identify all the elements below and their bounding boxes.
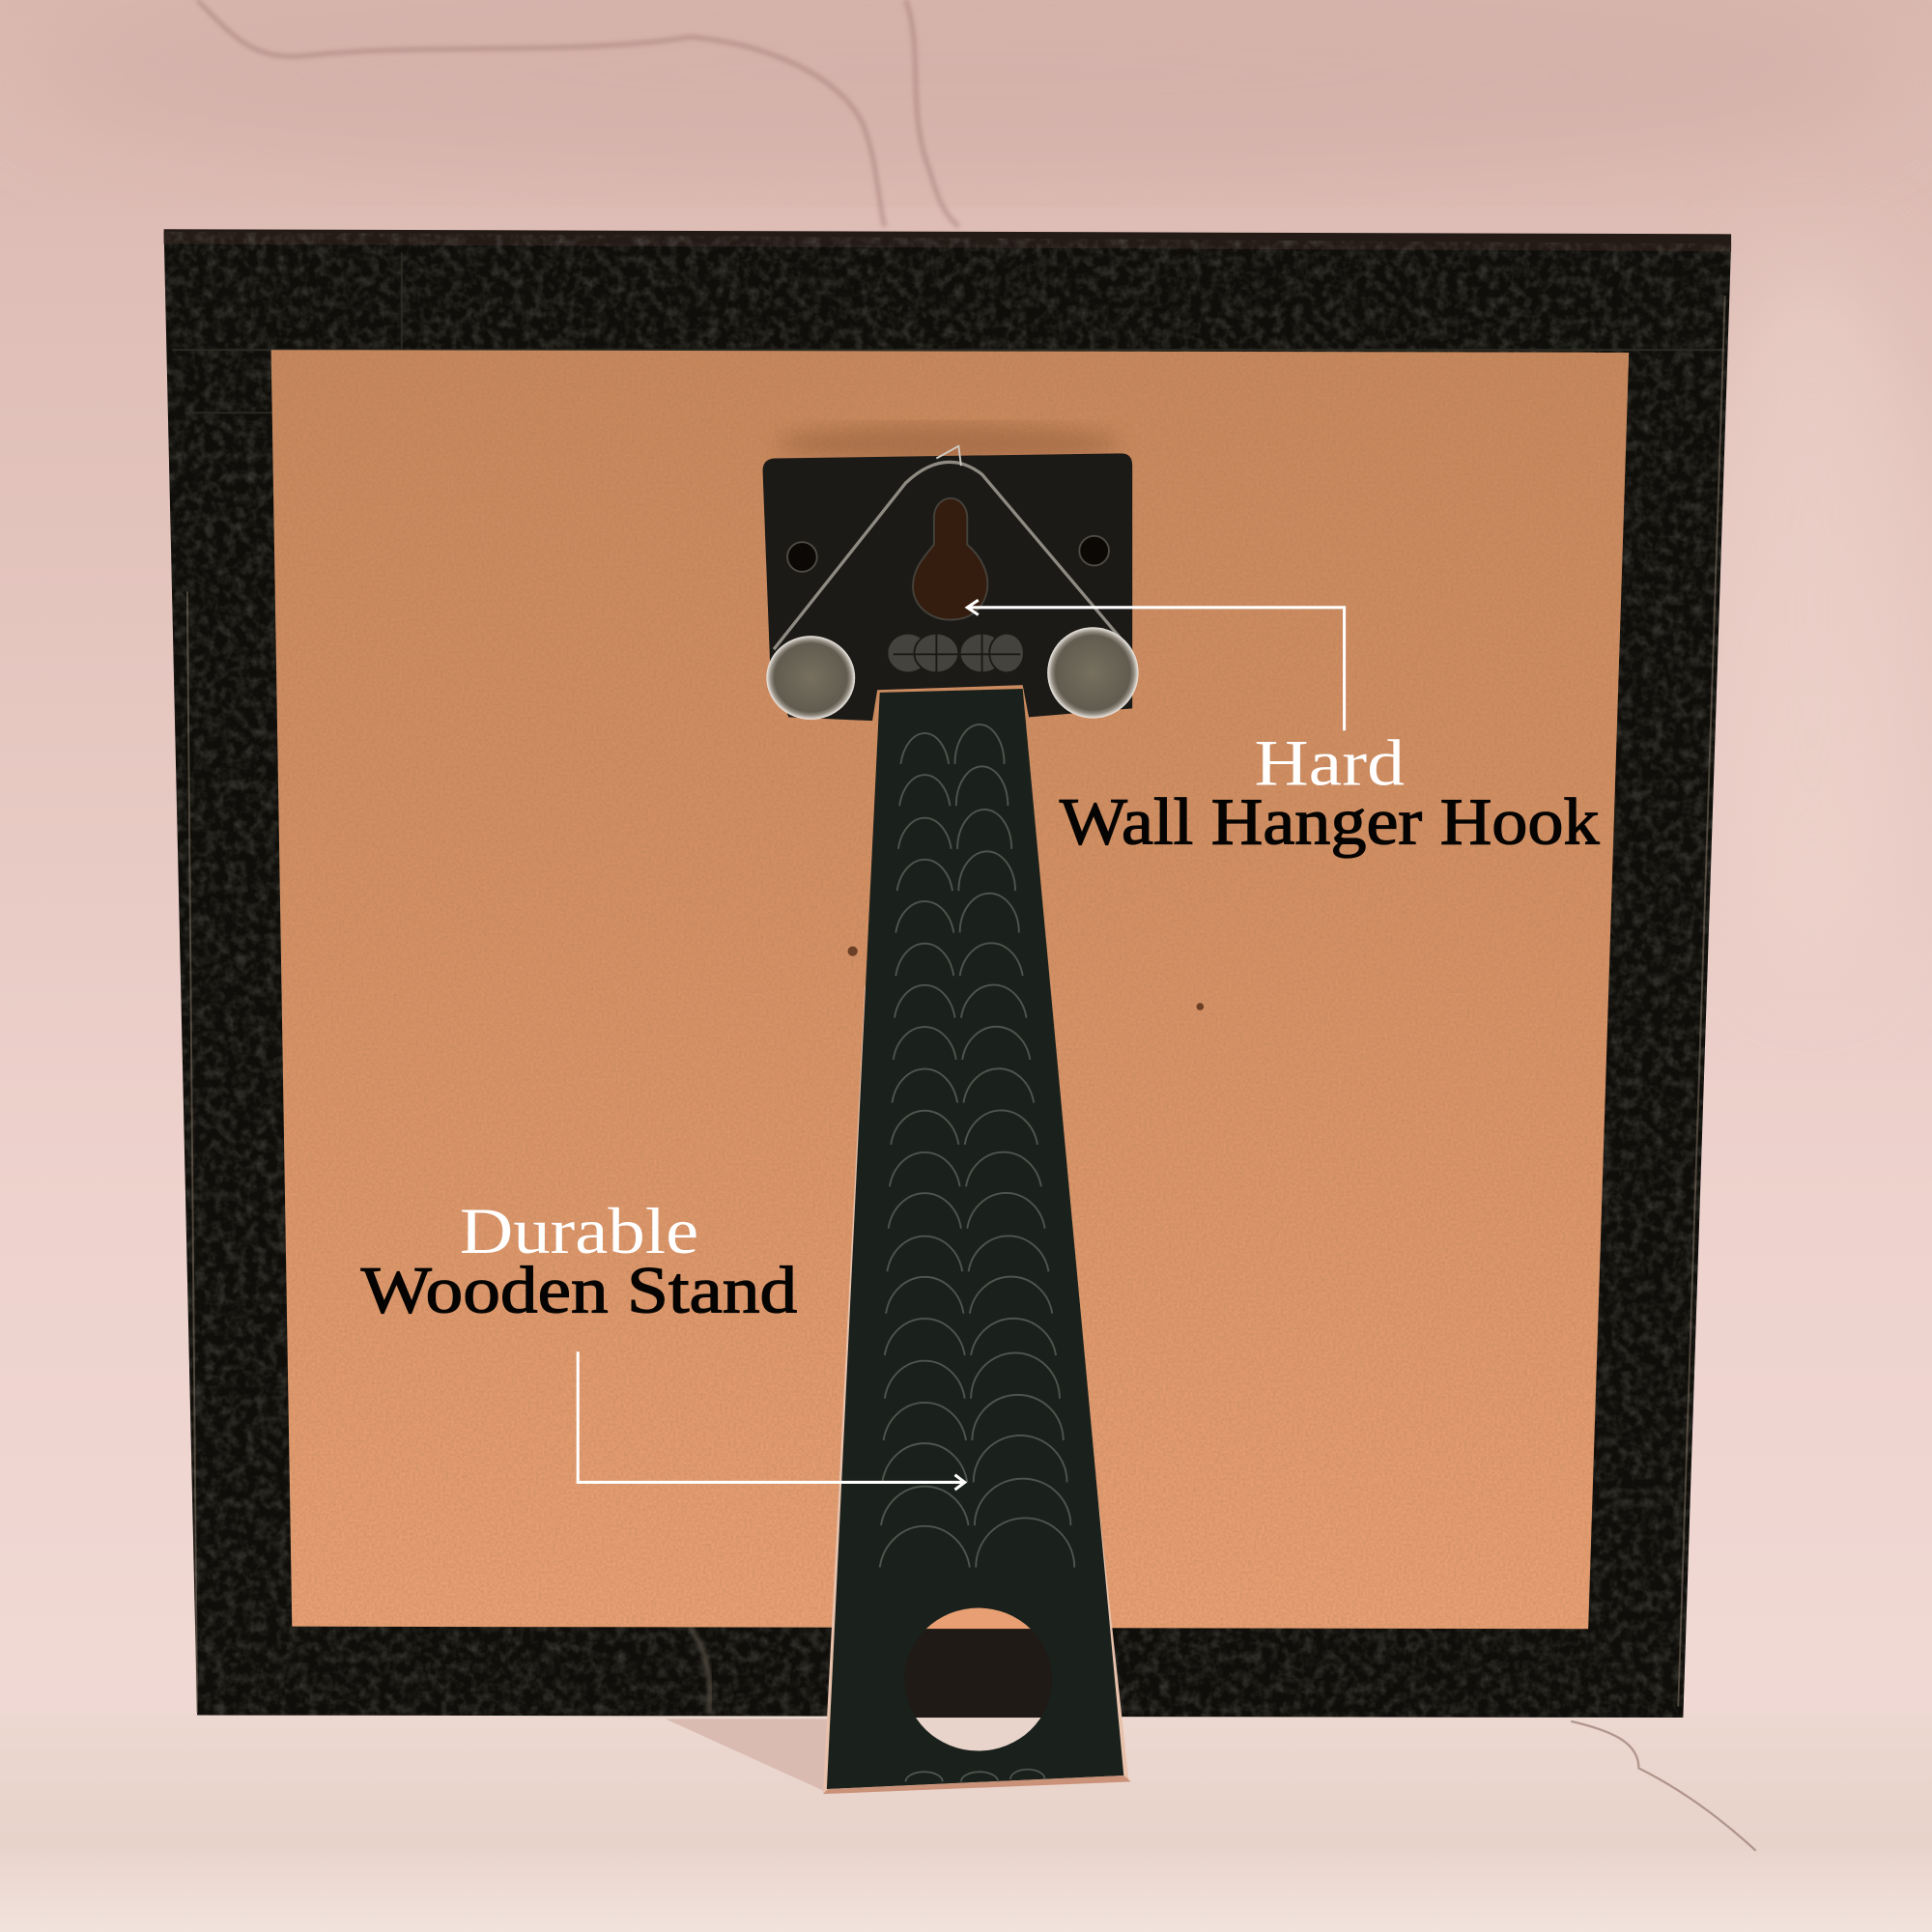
right screw (1047, 627, 1139, 719)
label: Durable: Durable (460, 1195, 698, 1267)
icon: wooden easel stand (823, 689, 1131, 1794)
hanger plate (763, 453, 1132, 721)
stand scallop pattern (880, 724, 1074, 1567)
label: Hard: Hard (1254, 726, 1405, 799)
label: Wall Hanger Hook: Wall Hanger Hook (1060, 785, 1600, 859)
mounting holes (787, 542, 817, 572)
stand hole (916, 1607, 1041, 1750)
arrow to stand (578, 1351, 965, 1490)
icon: wall hanger hook plate (763, 446, 1139, 721)
spring wire (774, 462, 1130, 649)
callout: hard wall hanger hook (967, 600, 1600, 859)
arrow to keyhole (967, 600, 1345, 730)
panel: black picture frame back (160, 229, 1737, 1720)
label: Wooden Stand: Wooden Stand (361, 1253, 797, 1326)
background: floor surface (0, 1713, 1932, 1932)
panel: kraft paper backing (259, 345, 1638, 1633)
left screw (766, 636, 855, 720)
callout: durable wooden stand (361, 1195, 965, 1490)
keyhole slot (913, 498, 987, 620)
embossed logo (887, 634, 1024, 672)
